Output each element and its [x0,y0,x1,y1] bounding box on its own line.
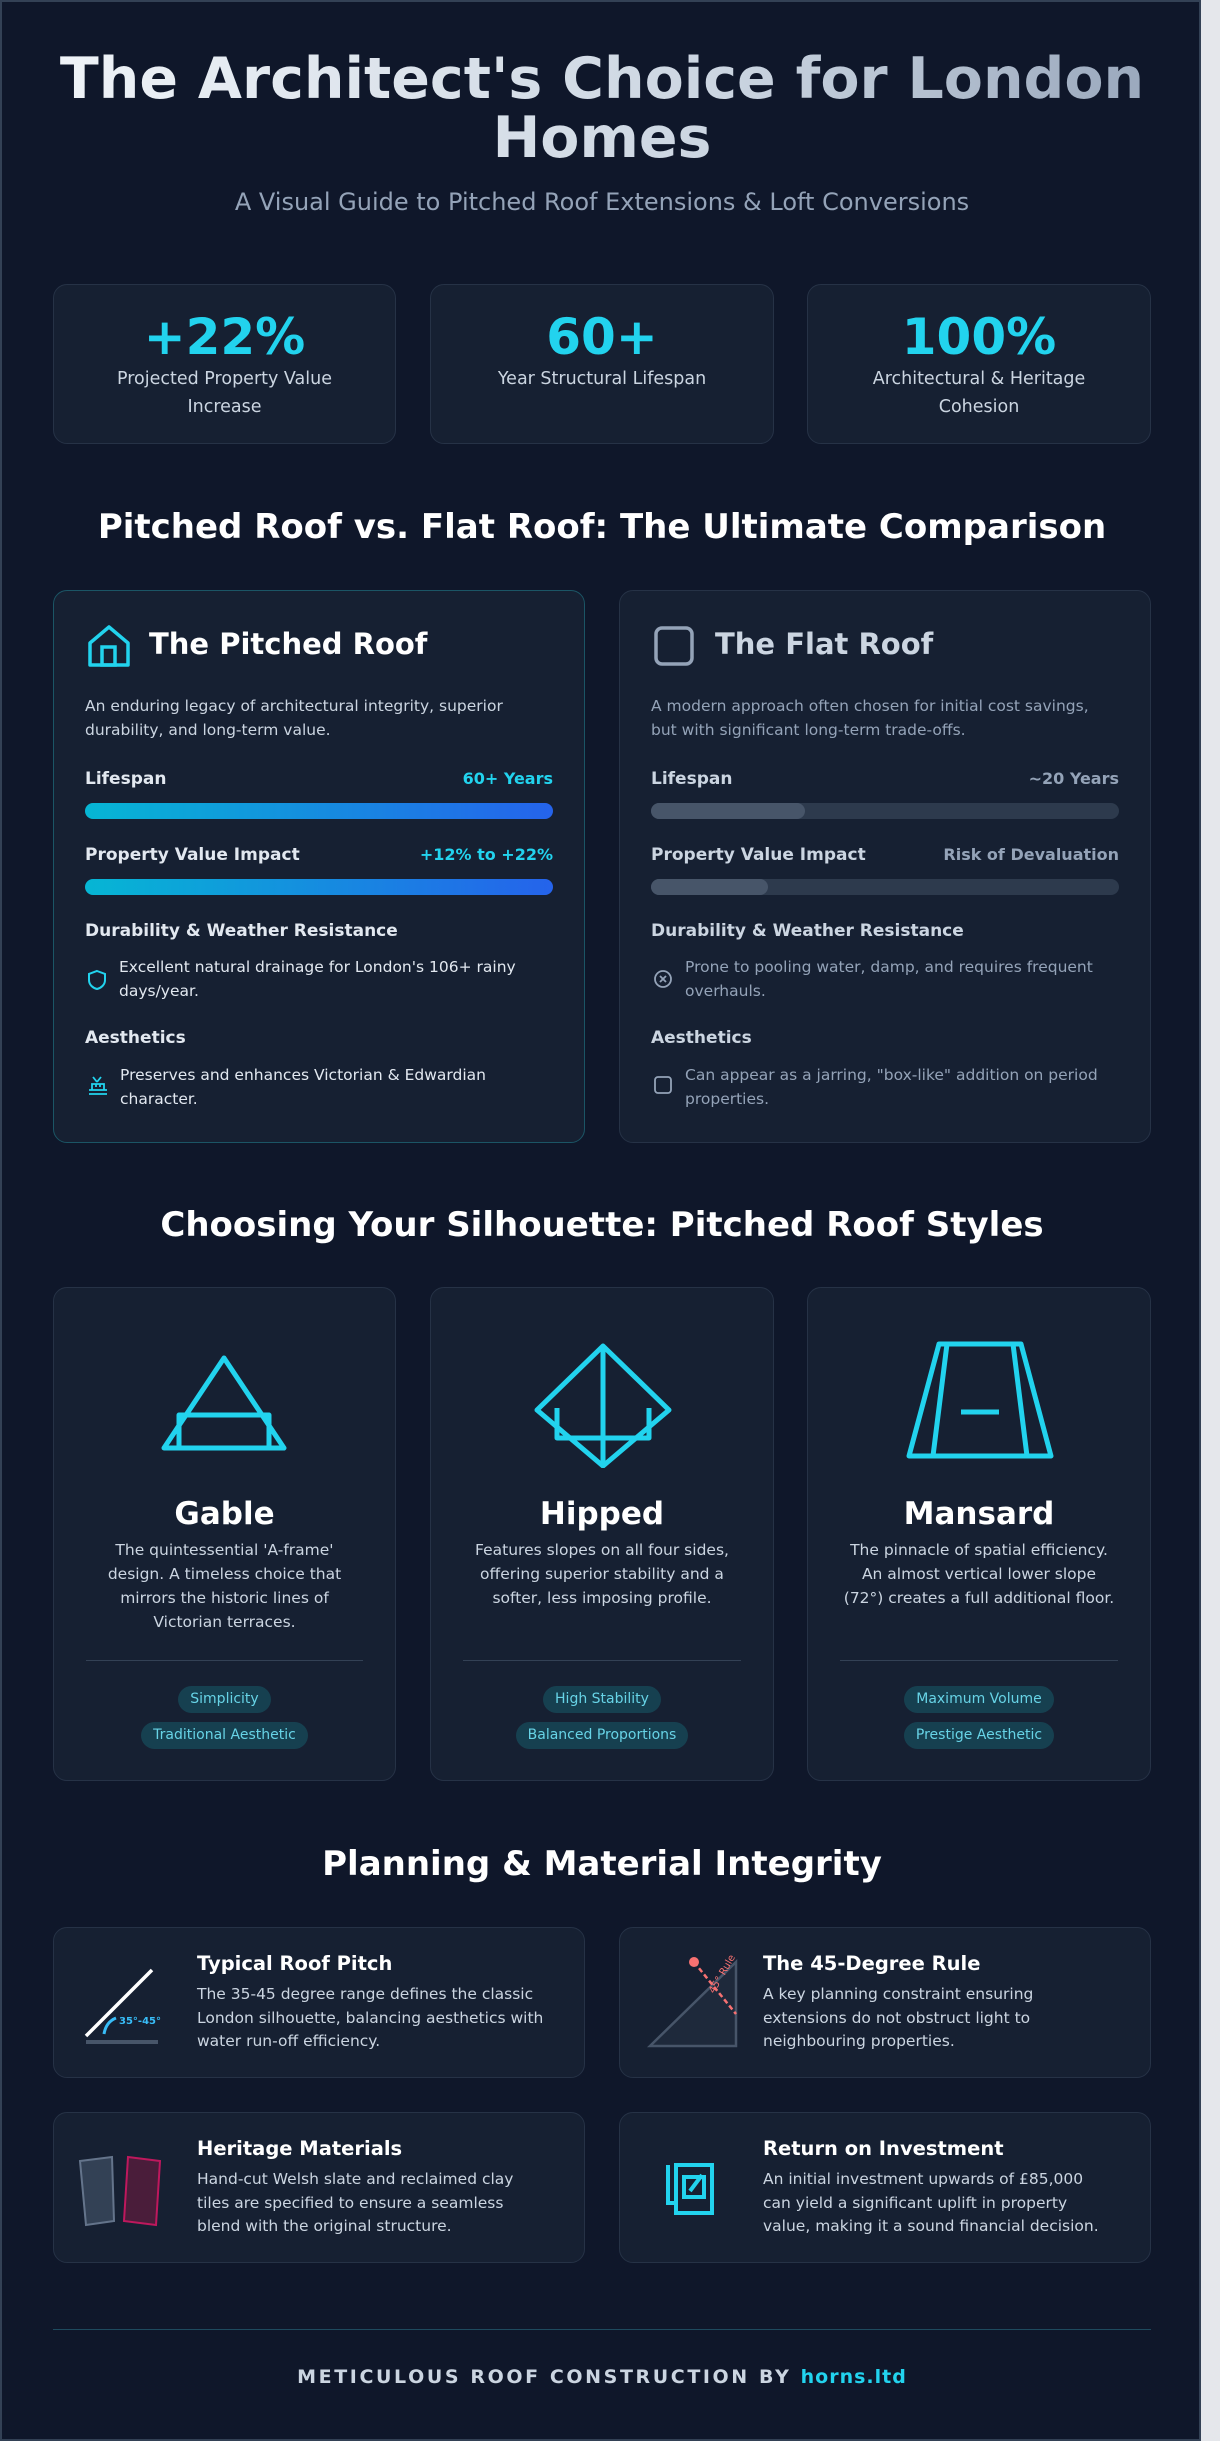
icon: shield [88,970,106,990]
tag: Simplicity [190,1691,259,1707]
title [2,50,1202,168]
panel: 45 degree: A key planning constraint ensuring extensions do not obstruct light to neighbouring properties. [763,1985,1033,2050]
panel: ROI [619,2112,1151,2263]
stat card: property value [53,284,396,444]
label lifespan: ~20 Years [1029,769,1119,788]
stat card: cohesion: 100% [902,308,1056,366]
panel: mansard: Mansard [904,1496,1054,1532]
stat card: property value: +22% [144,308,305,366]
icon: box [654,1076,672,1094]
icon: pitch [84,1968,161,2044]
tag: Traditional Aesthetic [153,1727,296,1743]
heading: styles: Choosing Your Silhouette: Pitched Roof Styles [160,1205,1044,1245]
panel: mansard: The pinnacle of spatial efficiency. [850,1541,1108,1559]
icon: growth [666,2163,714,2215]
panel: gable [53,1287,396,1781]
label value [85,845,553,865]
label aesthetics: Aesthetics [85,1028,186,1048]
bar value [85,879,553,895]
bar lifespan [651,803,1119,819]
stat card: property value: Projected Property Value Increase [117,369,332,417]
stat card: lifespan: Year Structural Lifespan [498,369,706,389]
label lifespan [651,769,1119,789]
durability text: Excellent natural drainage for London's 106+ rainy days/year. [119,958,516,1000]
description: A modern approach often chosen for initial cost savings, but with significant long-term trade-offs. [651,697,1089,739]
label aesthetics: Aesthetics [651,1028,752,1048]
panel: mansard: (72°) creates a full additional floor. [844,1589,1114,1607]
stat card: cohesion: Architectural & Heritage Cohesion [873,369,1085,417]
panel: heritage materials: Hand-cut Welsh slate and reclaimed clay tiles are specified to ensure a seamless blend with the original structure. [197,2170,513,2235]
icon: x circle [654,970,672,988]
icon: pitch: 35°-45° [119,2016,161,2027]
icon: gable [162,1356,286,1450]
card title: The Flat Roof [715,627,933,661]
title: The Architect's Choice for London [60,46,1144,112]
aesthetics text: Preserves and enhances Victorian & Edwardian character. [120,1066,486,1108]
panel: gable: The quintessential 'A-frame' design. A timeless choice that mirrors the historic lines of Victorian terraces. [108,1541,341,1631]
icon: building [89,1076,107,1095]
icon: mansard [906,1342,1054,1458]
label lifespan: Lifespan [85,769,166,789]
icon: tiles [79,2156,162,2226]
panel: mansard [807,1287,1151,1781]
panel: hipped: Hipped [540,1496,664,1532]
card title: The Pitched Roof [149,627,427,661]
panel: roof pitch: Typical Roof Pitch [197,1952,392,1975]
panel: ROI: Return on Investment [763,2137,1004,2160]
label durability: Durability & Weather Resistance [85,921,398,941]
panel: hipped: Features slopes on all four sides, offering superior stability and a softer, less imposing profile. [475,1541,729,1607]
subtitle: A Visual Guide to Pitched Roof Extensions & Loft Conversions [235,188,969,216]
panel: ROI: An initial investment upwards of £85,000 can yield a significant uplift in property value, making it a sound financial decision. [763,2170,1099,2235]
panel: hipped [430,1287,774,1781]
heading: comparison: Pitched Roof vs. Flat Roof: The Ultimate Comparison [98,507,1106,547]
icon: hipped [534,1344,672,1468]
panel: heritage materials: Heritage Materials [197,2137,402,2160]
panel: roof pitch: The 35-45 degree range defines the classic London silhouette, balancing aesthetics with water run-off efficiency. [197,1985,543,2050]
icon: square [654,626,694,666]
description: An enduring legacy of architectural integrity, superior durability, and long-term value. [85,697,503,739]
label value: Property Value Impact [651,845,866,865]
footer: METICULOUS ROOF CONSTRUCTION BY horns.ltd [297,2366,907,2388]
bar value [651,879,1119,895]
icon: 45 rule [647,1953,738,2048]
label value: +12% to +22% [420,845,553,864]
icon: house [88,625,130,667]
label value [651,845,1119,865]
panel: gable: Gable [174,1496,275,1532]
panel: flat roof [619,590,1151,1143]
tag: High Stability [555,1691,649,1707]
stat card: lifespan [430,284,774,444]
tag: Maximum Volume [916,1691,1042,1707]
bar lifespan [85,803,553,819]
label value: Risk of Devaluation [943,845,1119,864]
title: Homes [493,105,711,171]
aesthetics text: Can appear as a jarring, "box-like" addition on period properties. [685,1066,1098,1108]
durability text: Prone to pooling water, damp, and requires frequent overhauls. [685,958,1093,1000]
divider [53,2329,1151,2330]
panel: roof pitch [53,1927,585,2078]
label lifespan: Lifespan [651,769,732,789]
panel: pitched roof [53,590,585,1143]
tag: Balanced Proportions [528,1727,676,1743]
tag: Prestige Aesthetic [916,1727,1042,1743]
stat card: lifespan: 60+ [546,308,658,366]
label lifespan [85,769,553,789]
panel: 45 degree: The 45-Degree Rule [763,1952,980,1975]
icon: 45 rule: 45° Rule [707,1953,738,1996]
panel: mansard: An almost vertical lower slope [862,1565,1096,1583]
label durability: Durability & Weather Resistance [651,921,964,941]
label lifespan: 60+ Years [463,769,553,788]
stat card: cohesion [807,284,1151,444]
panel: 45 degree [619,1927,1151,2078]
heading: planning: Planning & Material Integrity [322,1844,882,1884]
label value: Property Value Impact [85,845,300,865]
panel: heritage materials [53,2112,585,2263]
